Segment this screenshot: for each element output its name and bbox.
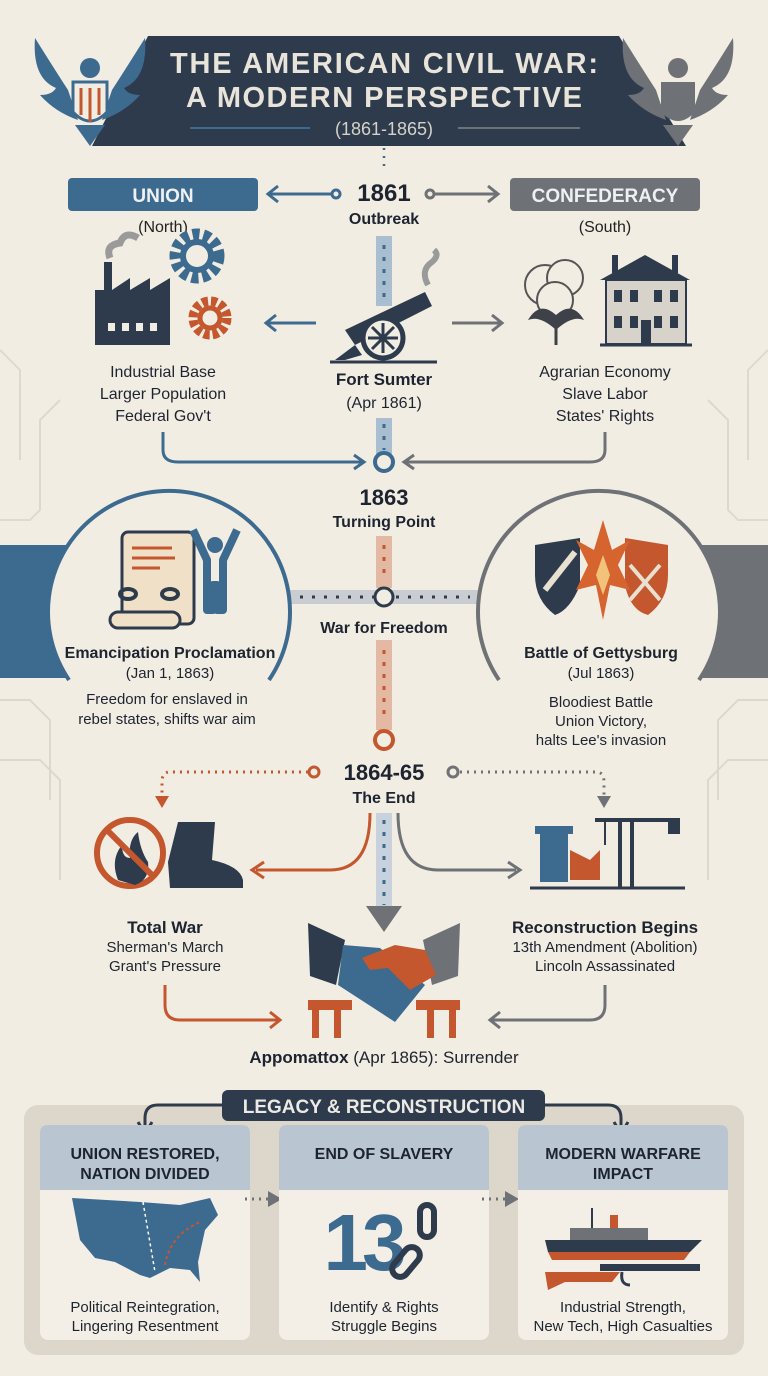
text: fort sumter: Fort Sumter (336, 370, 433, 389)
icon: ironclad ship (545, 1208, 702, 1260)
card: union restored: Lingering Resentment (72, 1318, 219, 1335)
panel: emancipation: Freedom for enslaved in (86, 691, 248, 708)
1864-65 node (344, 760, 424, 807)
card: end of slavery: Struggle Begins (331, 1318, 437, 1335)
panel: emancipation (48, 491, 290, 728)
icon: us map (72, 1198, 218, 1282)
card: union restored: NATION DIVIDED (80, 1166, 210, 1183)
icon: rifle (545, 1264, 700, 1290)
card: union restored (40, 1125, 250, 1340)
icon: proclamation scroll (110, 530, 237, 628)
card: modern warfare: Industrial Strength, (560, 1299, 686, 1316)
legacy title: LEGACY & RECONSTRUCTION (243, 1097, 525, 1118)
confederacy label: CONFEDERACY (532, 186, 679, 207)
panel: gettysburg: halts Lee's invasion (536, 732, 666, 749)
panel: gettysburg: Bloodiest Battle (549, 694, 653, 711)
text: total war: Sherman's March (106, 939, 224, 956)
icon: union eagle (35, 38, 145, 146)
1863 node: 1863 (360, 485, 408, 510)
dotted arrow (482, 1191, 519, 1207)
union label: (North) (138, 219, 188, 236)
icon: total war (97, 820, 243, 888)
arrows to appomattox (165, 985, 605, 1028)
panel: gettysburg: Union Victory, (555, 713, 647, 730)
card: modern warfare: IMPACT (593, 1166, 653, 1183)
card: modern warfare: MODERN WARFARE (545, 1146, 701, 1163)
icon: crossed shields (535, 520, 668, 620)
panel: emancipation: (Jan 1, 1863) (126, 665, 214, 682)
text: confederacy traits: Slave Labor (562, 386, 648, 403)
panel: emancipation: rebel states, shifts war aim (78, 711, 256, 728)
legacy title (222, 1090, 545, 1121)
card: modern warfare: New Tech, High Casualties (534, 1318, 712, 1335)
text: union strengths: Industrial Base (110, 364, 216, 381)
card: union restored: Political Reintegration, (70, 1299, 220, 1316)
text: reconstruction: Lincoln Assassinated (535, 958, 675, 975)
card: end of slavery (279, 1125, 489, 1340)
1861 node: 1861 (357, 180, 411, 207)
text: total war: Total War (127, 918, 203, 937)
dotted arrow (245, 1191, 282, 1207)
union label: UNION (132, 186, 194, 207)
arrow to union (268, 186, 340, 202)
icon: 13 broken chain: 13 (324, 1198, 404, 1287)
text: union strengths: Larger Population (100, 386, 226, 403)
panel: gettysburg: Battle of Gettysburg (524, 645, 678, 662)
title banner (92, 36, 686, 146)
1864-65 node: The End (352, 790, 416, 807)
text: confederacy traits: Agrarian Economy (539, 364, 671, 381)
panel: emancipation: Emancipation Proclamation (65, 645, 275, 662)
dates: (1861-1865) (335, 119, 433, 139)
arrow to confederacy (426, 186, 498, 202)
text: confederacy traits: States' Rights (556, 408, 654, 425)
1861 node: Outbreak (349, 211, 419, 228)
text: fort sumter: (Apr 1861) (346, 395, 422, 412)
icon: 13 broken chain (324, 1198, 434, 1287)
icon: handshake (308, 923, 460, 1038)
icon: factory and gears (95, 234, 227, 345)
title banner: A MODERN PERSPECTIVE (186, 82, 582, 114)
text: appomattox: Appomattox (Apr 1865): Surrender (249, 1048, 519, 1067)
confederacy label (510, 178, 700, 236)
text: fort sumter (336, 370, 433, 412)
horizontal connector (285, 590, 485, 604)
converging arrows (163, 432, 605, 471)
branching arrows (252, 813, 520, 878)
text: union strengths: Federal Gov't (115, 408, 211, 425)
1863 node (333, 485, 436, 531)
panel: gettysburg: (Jul 1863) (568, 665, 634, 682)
card: modern warfare (518, 1125, 728, 1340)
icon: reconstruction (530, 820, 685, 888)
text: union strengths (100, 364, 226, 425)
1863 node: Turning Point (333, 514, 436, 531)
text: total war (106, 918, 224, 975)
text: total war: Grant's Pressure (109, 958, 221, 975)
text: confederacy traits (539, 364, 671, 425)
text: war for freedom: War for Freedom (320, 620, 448, 637)
side bars (0, 545, 66, 678)
icon: cotton and plantation house (525, 255, 692, 345)
text: reconstruction (512, 918, 698, 975)
timeline spine top (376, 236, 392, 454)
icon: cannon (330, 250, 437, 362)
text: reconstruction: 13th Amendment (Abolition) (512, 939, 698, 956)
icon: confederate eagle (623, 38, 733, 146)
panel: legacy (24, 1090, 744, 1355)
1861 node (349, 180, 419, 228)
card: end of slavery: Identify & Rights (329, 1299, 439, 1316)
card: end of slavery: END OF SLAVERY (315, 1146, 454, 1163)
union label (68, 178, 258, 236)
card: union restored: UNION RESTORED, (70, 1146, 220, 1163)
dotted arrows (162, 772, 604, 795)
1864-65 node: 1864-65 (344, 760, 424, 785)
title: THE AMERICAN CIVIL WAR: (170, 48, 598, 80)
panel: gettysburg (478, 491, 720, 749)
text: reconstruction: Reconstruction Begins (512, 918, 698, 937)
confederacy label: (South) (579, 219, 631, 236)
spine middle (375, 536, 393, 749)
